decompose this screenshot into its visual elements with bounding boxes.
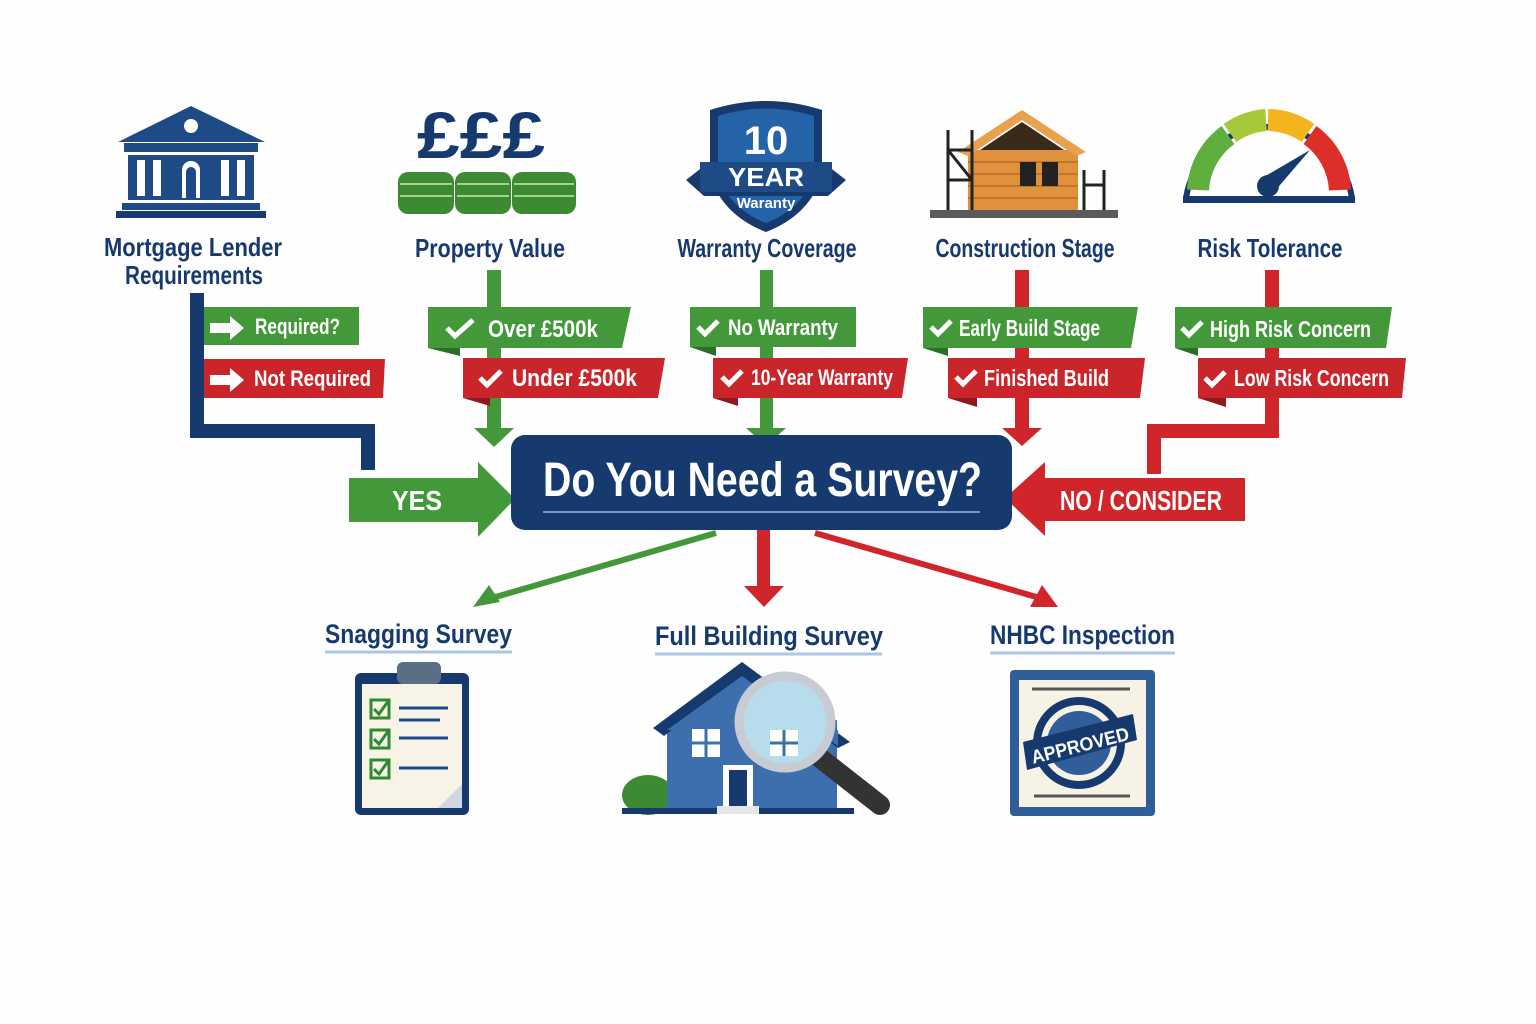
icon: bank xyxy=(116,106,266,218)
heading: Full Building Survey: Full Building Survey xyxy=(655,621,883,651)
icon: clipboard checklist xyxy=(355,662,469,815)
banner: Over £500k: Over £500k xyxy=(488,316,599,343)
banner: Required? xyxy=(204,307,359,345)
heading: column labels xyxy=(104,232,1342,290)
icon: 10 year warranty shield: YEAR xyxy=(728,162,804,192)
banner: Early Build Stage xyxy=(923,307,1138,356)
heading: NHBC Inspection: NHBC Inspection xyxy=(990,620,1175,650)
arrow: YES: YES xyxy=(392,485,442,516)
icon: pounds and coins xyxy=(398,98,576,214)
heading: column labels: Risk Tolerance xyxy=(1198,233,1342,263)
flow line: warranty (green arrow) xyxy=(746,270,786,446)
icon: 10 year warranty shield: 10 xyxy=(744,119,788,163)
banner: Not Required xyxy=(204,359,385,398)
heading: column labels: Requirements xyxy=(125,260,263,290)
banner: No Warranty: No Warranty xyxy=(728,315,839,340)
flow line: mortgage lender (blue) xyxy=(190,293,375,470)
banner: Finished Build: Finished Build xyxy=(984,365,1109,391)
heading: column labels: Construction Stage xyxy=(936,233,1114,263)
heading: Snagging Survey: Snagging Survey xyxy=(325,619,512,649)
arrow: to snagging survey xyxy=(473,533,716,607)
icon: house under construction xyxy=(930,110,1118,218)
central question box xyxy=(511,435,1012,530)
banner: Early Build Stage: Early Build Stage xyxy=(959,315,1100,341)
icon: 10 year warranty shield xyxy=(686,101,846,232)
banner: Low Risk Concern xyxy=(1198,358,1406,407)
flow line: risk tolerance (red) xyxy=(1147,270,1279,474)
banner: High Risk Concern: High Risk Concern xyxy=(1210,316,1371,342)
arrow: NO / CONSIDER xyxy=(1005,462,1245,536)
icon: approved certificate xyxy=(1010,670,1155,816)
arrow: to NHBC inspection xyxy=(815,533,1058,607)
icon: approved certificate: APPROVED xyxy=(1029,724,1131,769)
central question box: Do You Need a Survey? xyxy=(543,454,982,507)
arrow: to full building survey xyxy=(744,530,784,607)
flow line: construction stage (red arrow) xyxy=(1002,270,1042,446)
banner: Not Required: Not Required xyxy=(254,366,371,391)
banner: 10-Year Warranty: 10-Year Warranty xyxy=(751,365,894,390)
arrow: YES xyxy=(349,462,515,537)
icon: risk gauge xyxy=(1183,120,1355,203)
banner: Low Risk Concern: Low Risk Concern xyxy=(1234,365,1389,391)
icon: house with magnifier xyxy=(622,662,880,815)
banner: Over £500k xyxy=(428,307,631,356)
arrow: NO / CONSIDER: NO / CONSIDER xyxy=(1060,485,1222,516)
banner: No Warranty xyxy=(690,307,856,356)
banner: Under £500k: Under £500k xyxy=(512,365,638,392)
banner: 10-Year Warranty xyxy=(713,358,908,406)
heading: column labels: Warranty Coverage xyxy=(678,233,856,263)
icon: 10 year warranty shield: Waranty xyxy=(737,195,796,212)
heading: column labels: Property Value xyxy=(415,233,565,263)
banner: High Risk Concern xyxy=(1175,307,1392,356)
banner: Under £500k xyxy=(463,358,665,406)
banner: Required?: Required? xyxy=(255,314,340,339)
banner: Finished Build xyxy=(948,358,1145,407)
heading: column labels: Mortgage Lender xyxy=(104,232,282,262)
icon: pounds and coins: £££ xyxy=(417,98,545,172)
flow line: property value (green arrow) xyxy=(474,270,514,447)
